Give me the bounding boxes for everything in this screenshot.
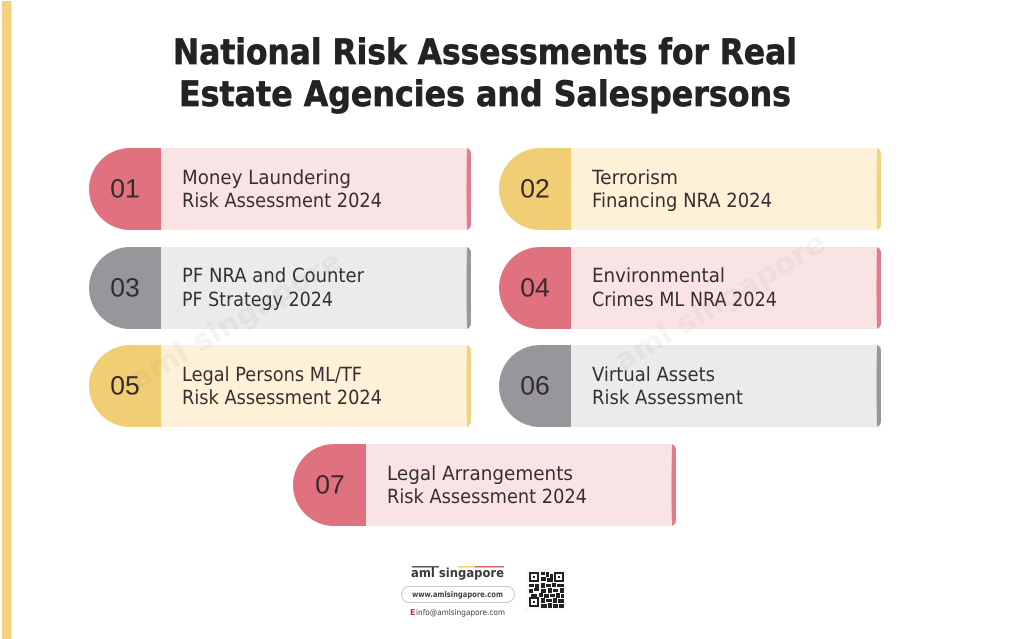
card 07: [293, 444, 676, 526]
email: E: [410, 608, 415, 617]
card 06: [499, 345, 881, 427]
card 04: 04: [520, 272, 550, 302]
card 01: Money Laundering: [182, 166, 351, 189]
card 05: 05: [110, 370, 140, 400]
left accent bar: [2, 1, 12, 639]
card 07: 07: [315, 470, 345, 500]
card 01: [89, 148, 471, 230]
email: info@amlsingapore.com: [416, 608, 505, 617]
QR code: [525, 568, 568, 612]
card 02: [499, 148, 881, 230]
card 06: Virtual Assets: [592, 363, 715, 386]
card 04: [499, 247, 881, 329]
title: Estate Agencies and Salespersons: [179, 75, 791, 115]
card 03: PF NRA and Counter: [182, 264, 365, 287]
footer logo: aml singapore: [411, 565, 504, 580]
card 03: [89, 247, 471, 329]
title: National Risk Assessments for Real: [173, 33, 797, 73]
card 04: Crimes ML NRA 2024: [592, 288, 777, 311]
card 07: Legal Arrangements: [387, 462, 573, 485]
card 02: Terrorism: [591, 166, 678, 189]
card 05: Legal Persons ML/TF: [182, 363, 362, 386]
title: [173, 33, 797, 115]
card 04: Environmental: [592, 264, 725, 287]
card 05: [89, 345, 471, 427]
card 02: Financing NRA 2024: [592, 189, 772, 212]
watermark: left: aml singapore: [124, 243, 347, 396]
card 01: Risk Assessment 2024: [182, 189, 382, 212]
card 06: 06: [520, 370, 550, 400]
card 05: Risk Assessment 2024: [182, 386, 382, 409]
card 06: Risk Assessment: [592, 386, 743, 409]
card 01: 01: [110, 174, 140, 204]
card 03: PF Strategy 2024: [182, 288, 333, 311]
watermark: right: aml singapore: [608, 225, 831, 378]
website pill: www.amlsingapore.com: [412, 590, 503, 599]
card 02: 02: [520, 174, 550, 204]
website pill: [402, 586, 514, 602]
card 07: Risk Assessment 2024: [387, 485, 587, 508]
card 03: 03: [110, 272, 140, 302]
